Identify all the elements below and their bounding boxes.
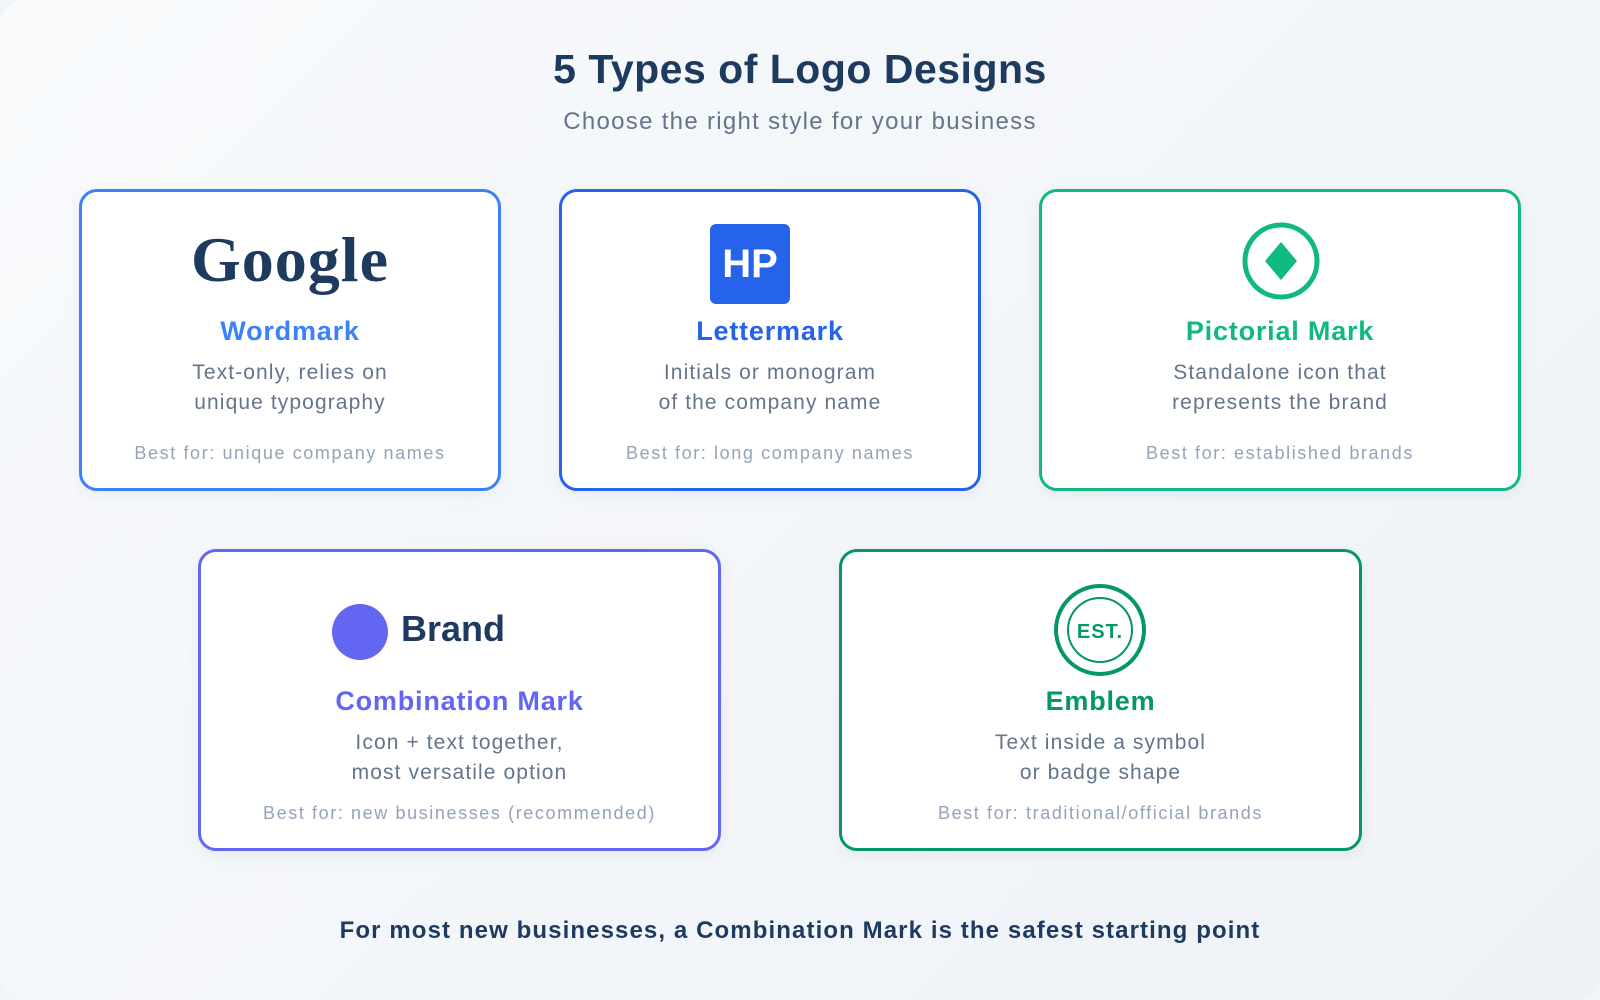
- description: Text-only, relies on: [192, 361, 388, 384]
- subtitle: Choose the right style for your business: [563, 108, 1037, 135]
- panel: wordmark: [79, 189, 501, 491]
- logo: Brand: Brand: [401, 608, 505, 649]
- logo: Google: Google: [191, 224, 389, 295]
- description: [352, 731, 567, 784]
- description: Initials or monogram: [664, 361, 876, 384]
- description: [192, 361, 388, 414]
- best for: Best for: new businesses (recommended): [263, 803, 656, 823]
- panel: pictorial: [1039, 189, 1521, 491]
- icon: EST badge: [1054, 584, 1146, 676]
- description: Standalone icon that: [1173, 361, 1387, 384]
- description: [995, 731, 1206, 784]
- description: Text inside a symbol: [995, 731, 1206, 754]
- footer note: For most new businesses, a Combination Mark is the safest starting point: [340, 917, 1260, 944]
- description: represents the brand: [1172, 391, 1388, 414]
- description: most versatile option: [352, 761, 567, 784]
- icon: HP: [710, 224, 790, 304]
- heading: Pictorial Mark: [1186, 316, 1374, 346]
- best for: Best for: unique company names: [134, 443, 446, 463]
- icon: diamond circle: [1242, 222, 1320, 300]
- panel: emblem: [839, 549, 1362, 851]
- heading: Wordmark: [220, 316, 360, 346]
- best for: Best for: long company names: [626, 443, 914, 463]
- panel: combination: [198, 549, 721, 851]
- description: unique typography: [194, 391, 386, 414]
- panel: lettermark: [559, 189, 981, 491]
- heading: Combination Mark: [335, 686, 584, 716]
- logo: Brand: [332, 604, 505, 660]
- description: [1172, 361, 1388, 414]
- description: of the company name: [659, 391, 881, 414]
- description: or badge shape: [1020, 761, 1181, 784]
- description: Icon + text together,: [355, 731, 564, 754]
- description: [659, 361, 881, 414]
- icon: HP: HP: [722, 242, 778, 286]
- heading: Emblem: [1046, 686, 1155, 716]
- icon: EST badge: EST.: [1077, 621, 1123, 643]
- best for: Best for: established brands: [1146, 443, 1414, 463]
- best for: Best for: traditional/official brands: [938, 803, 1263, 823]
- heading: Lettermark: [696, 316, 844, 346]
- title: 5 Types of Logo Designs: [553, 46, 1047, 92]
